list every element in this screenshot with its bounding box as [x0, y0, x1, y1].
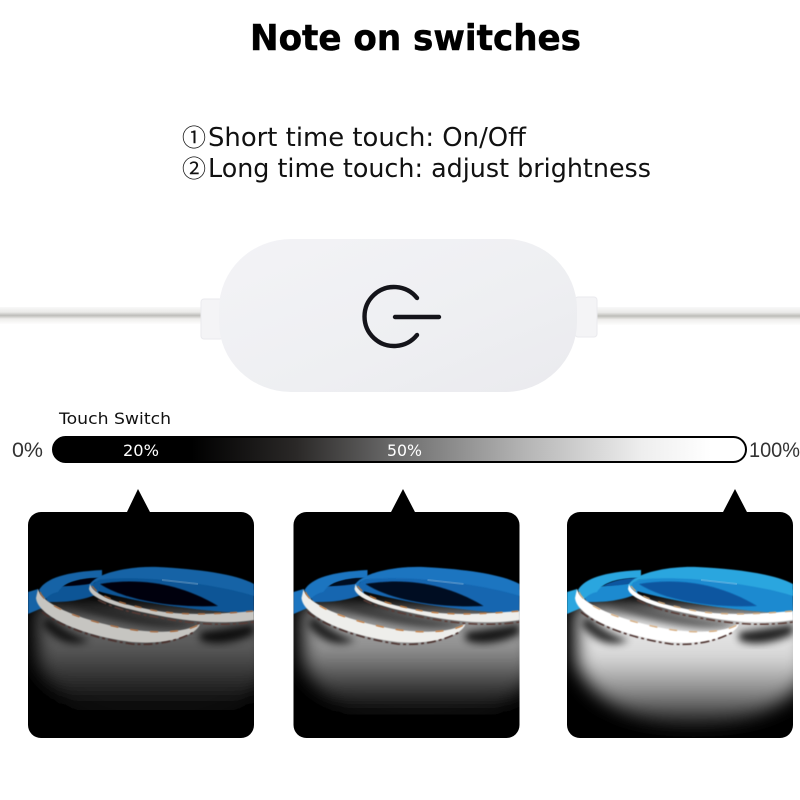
panel: LED strip at 20% brightness	[28, 512, 268, 738]
pointer arrow: 50%	[390, 489, 416, 514]
pointer arrow: 100%	[722, 489, 748, 514]
label: touch switch: Touch Switch	[58, 409, 171, 428]
panel: LED strip at 100% brightness	[567, 512, 800, 738]
instructions text block	[182, 118, 651, 184]
panel: LED strip at 50% brightness	[294, 512, 534, 738]
brightness scale	[12, 409, 800, 462]
switch body	[219, 239, 577, 392]
label: 20%: 20%	[123, 441, 159, 460]
touch switch device	[0, 239, 800, 392]
left connector	[201, 299, 223, 339]
left cable	[0, 307, 203, 324]
pointer arrow: 20%	[126, 489, 151, 514]
instruction: long touch: Long time touch: adjust brightness	[208, 154, 651, 184]
instruction: short touch: Short time touch: On/Off	[208, 123, 527, 153]
title: Note on switches	[250, 18, 581, 59]
right connector	[575, 297, 597, 337]
right cable	[596, 307, 800, 325]
instruction: short touch: ①	[182, 118, 206, 153]
instruction: long touch: ②	[182, 149, 206, 184]
label: 0%: 0%	[12, 439, 43, 462]
label: 50%: 50%	[387, 441, 422, 460]
icon: power symbol	[365, 287, 439, 346]
gradient bar	[53, 437, 746, 462]
